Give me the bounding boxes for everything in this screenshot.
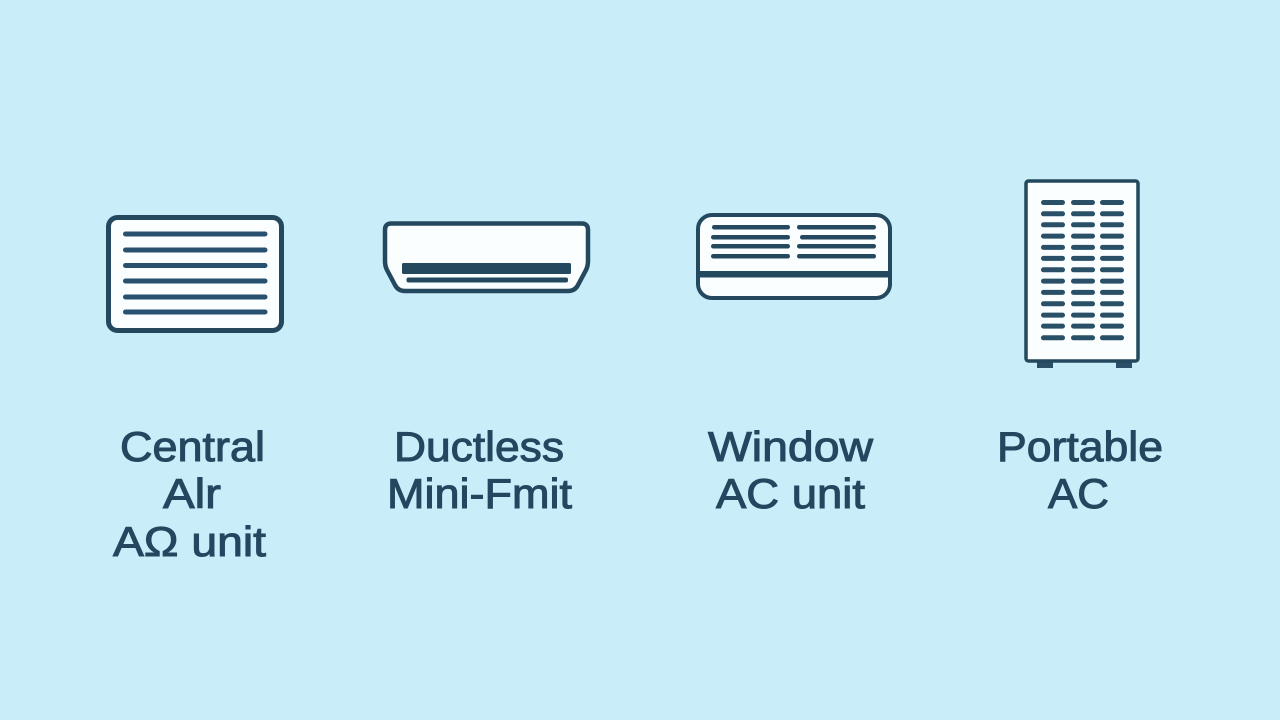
label: window AC unit: AC unit xyxy=(716,470,865,517)
label: window AC unit: Window xyxy=(708,423,874,470)
label: ductless mini-split xyxy=(387,423,572,517)
label: central air: AΩ unit xyxy=(113,518,266,565)
label: central air xyxy=(113,423,266,565)
label: portable AC xyxy=(997,423,1163,517)
label: portable AC: Portable xyxy=(997,423,1163,470)
icon: window AC unit xyxy=(698,215,890,298)
icon: portable AC unit xyxy=(1026,181,1138,368)
label: ductless mini-split: Mini-Fmit xyxy=(387,470,572,517)
icon: central air vent xyxy=(108,218,282,330)
label: portable AC: AC xyxy=(1048,470,1109,517)
label: ductless mini-split: Ductless xyxy=(394,423,564,470)
label: central air: Central xyxy=(120,423,265,470)
label: central air: Alr xyxy=(163,470,221,517)
icon: ductless mini-split unit xyxy=(385,224,588,291)
label: window AC unit xyxy=(708,423,874,517)
